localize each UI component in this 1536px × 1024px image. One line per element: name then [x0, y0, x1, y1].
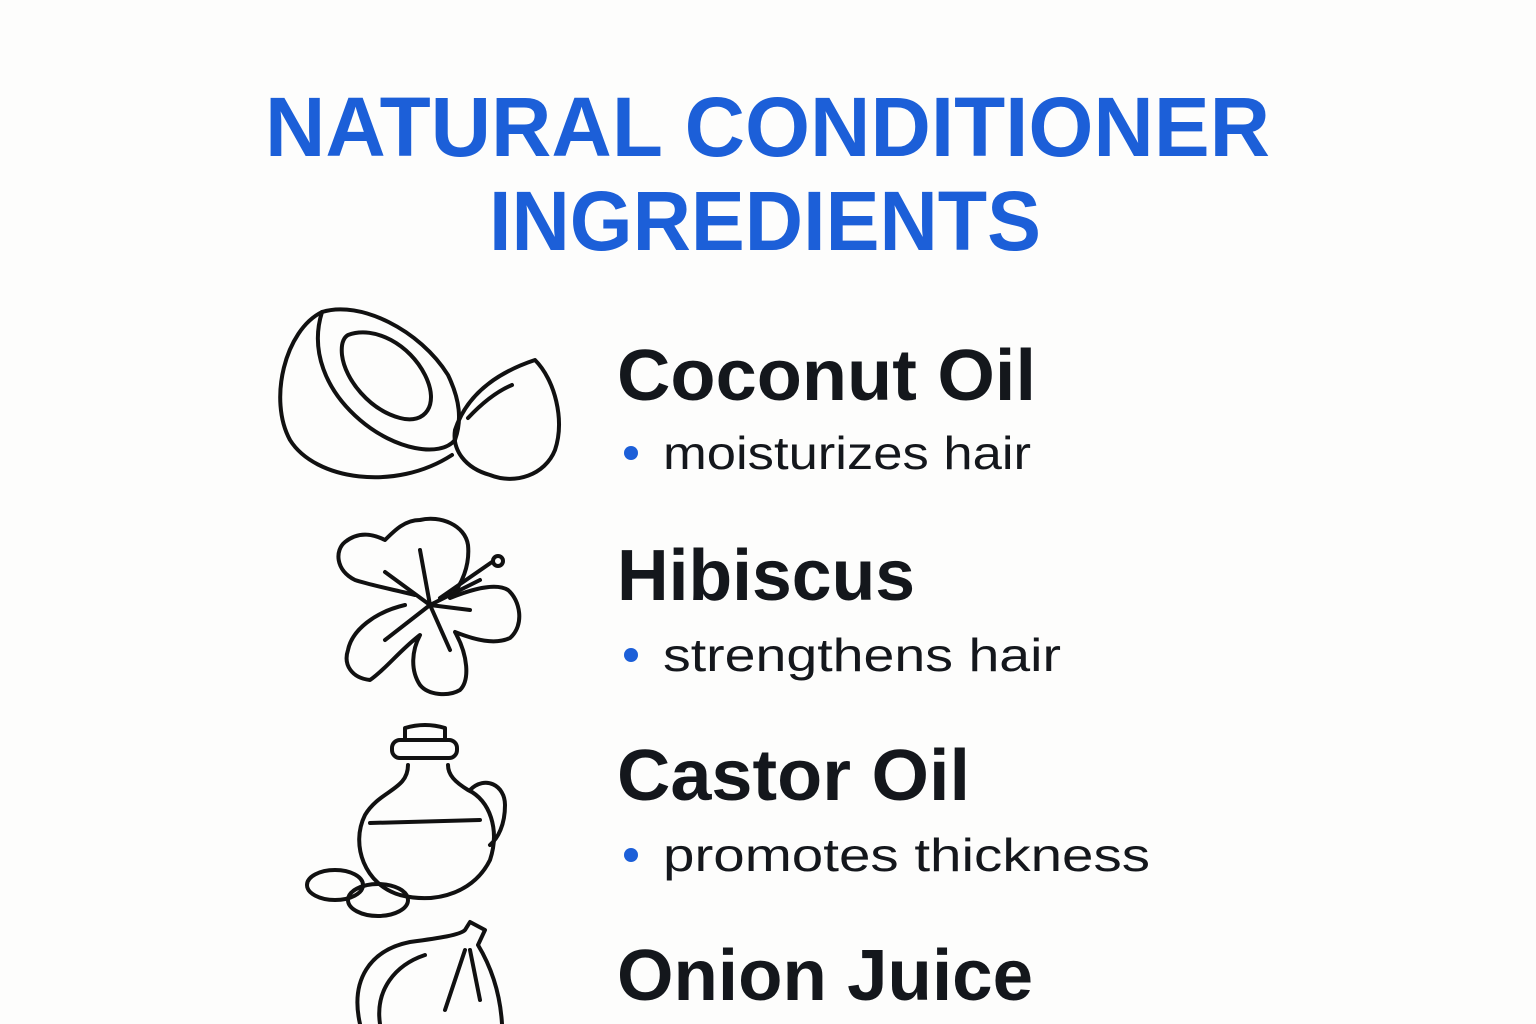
- icon: castor oil jug: [307, 725, 505, 916]
- ingredient: hibiscus: strengthens hair: [663, 629, 1061, 681]
- ingredient: castor oil: promotes thickness: [663, 829, 1150, 881]
- ingredient: coconut oil: moisturizes hair: [663, 427, 1031, 479]
- ingredient: hibiscus: [617, 536, 1061, 681]
- title: NATURAL CONDITIONER: [265, 80, 1270, 174]
- ingredient: castor oil: [617, 736, 1150, 881]
- ingredient: castor oil: Castor Oil: [617, 736, 970, 816]
- title: INGREDIENTS: [489, 174, 1041, 268]
- ingredient: onion juice: Onion Juice: [617, 936, 1033, 1016]
- icon: hibiscus: [338, 519, 519, 694]
- icon: coconut: [280, 309, 559, 479]
- ingredient: hibiscus: Hibiscus: [617, 536, 915, 616]
- ingredient: coconut oil: [617, 336, 1036, 479]
- title: [265, 80, 1270, 268]
- icon: onion: [357, 922, 502, 1024]
- ingredient: coconut oil: Coconut Oil: [617, 336, 1036, 416]
